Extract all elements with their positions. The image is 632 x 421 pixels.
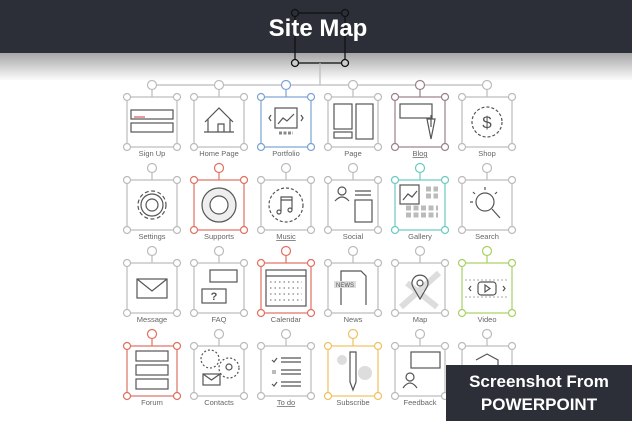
title: Site Map — [269, 15, 367, 42]
cell: Subscribe: Subscribe — [336, 398, 370, 407]
cell: Settings: Settings — [138, 232, 166, 241]
cell: Gallery: Gallery — [408, 232, 432, 241]
cell: Portfolio: Portfolio — [272, 149, 300, 158]
cell: Map: Map — [413, 315, 427, 324]
cell: Video: Video — [477, 315, 497, 324]
cell: Feedback — [392, 330, 448, 407]
cell: Blog: Blog — [412, 149, 428, 158]
cell: Gallery — [392, 164, 448, 241]
cell: Home Page: Home Page — [199, 149, 239, 158]
cell: Feedback: Feedback — [404, 398, 437, 407]
cell: Video — [458, 246, 516, 324]
cell: Page: Page — [344, 149, 362, 158]
cell: Contacts: Contacts — [204, 398, 234, 407]
cell: Portfolio — [258, 80, 314, 158]
cell: Sign Up: Sign Up — [139, 149, 165, 158]
cell: Subscribe — [324, 330, 382, 407]
cell: FAQ: ? — [211, 291, 218, 303]
cell: Message: Message — [137, 315, 167, 324]
root node box — [292, 10, 348, 66]
header band — [0, 0, 632, 81]
cell: Blog — [392, 80, 448, 158]
cell: partially hidden — [458, 330, 516, 396]
cell: Shop: $ — [482, 113, 492, 132]
cell: To do: To do — [277, 398, 295, 407]
cell: Shop — [458, 80, 516, 158]
overlay badge — [446, 365, 632, 421]
cell: News: NEWS — [336, 283, 354, 289]
cell: FAQ: FAQ — [211, 315, 227, 324]
cell: Supports: Supports — [204, 232, 234, 241]
cell: Calendar: Calendar — [271, 315, 302, 324]
cell: Settings — [124, 164, 180, 241]
cell: Social — [324, 164, 382, 241]
cell: Page — [324, 80, 382, 158]
cell: Music — [258, 164, 314, 241]
overlay badge: Screenshot From — [469, 372, 609, 391]
cell: Contacts — [190, 330, 248, 407]
cell: To do — [258, 330, 314, 407]
cell: News — [324, 246, 382, 324]
cell: Shop: Shop — [478, 149, 496, 158]
cell: Message — [124, 246, 180, 324]
cell: Sign Up — [124, 80, 180, 158]
cell: Map — [392, 246, 448, 324]
cell: Calendar — [258, 246, 314, 324]
cell: Music: Music — [276, 232, 296, 241]
overlay badge: POWERPOINT — [481, 395, 598, 414]
cell: Supports — [190, 164, 248, 241]
cell: Social: Social — [343, 232, 364, 241]
cell: Home Page — [190, 80, 248, 158]
cell: Search: Search — [475, 232, 499, 241]
connector tree — [152, 63, 487, 85]
cell: Search — [458, 164, 516, 241]
cell: Forum — [124, 330, 180, 407]
cell: FAQ — [190, 246, 248, 324]
cell: Forum: Forum — [141, 398, 163, 407]
cell: News: News — [344, 315, 363, 324]
